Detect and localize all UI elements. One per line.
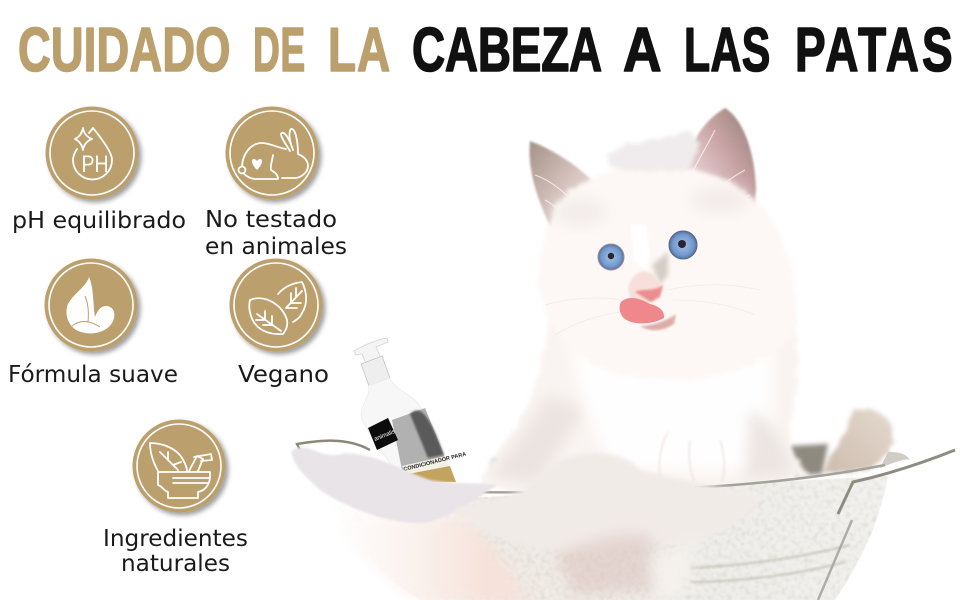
title: LA [328, 15, 390, 85]
tub rim [465, 465, 885, 492]
foam on head [608, 130, 700, 171]
bottle: animalis [374, 429, 396, 443]
tail [822, 409, 893, 474]
kitten body [478, 310, 812, 495]
bottle [354, 338, 467, 482]
icon: leaves [230, 258, 322, 352]
title [18, 15, 953, 85]
nose and tongue [620, 285, 676, 330]
tub body [330, 476, 888, 600]
title: LAS [684, 16, 770, 85]
eyes [598, 231, 697, 270]
label: Fórmula suave [8, 362, 178, 388]
badge: fórmula suave [8, 258, 178, 388]
icon: rabbit [226, 106, 318, 200]
label: Vegano [238, 362, 329, 388]
tub back rim [492, 444, 828, 482]
icon: pH drop: PH [82, 151, 108, 178]
icon: feather [44, 258, 138, 352]
icon: pH drop [46, 106, 138, 200]
kitten head [540, 165, 795, 380]
label: pH equilibrado [12, 208, 186, 234]
badge: ingredientes naturales [103, 420, 248, 577]
title: DE [253, 15, 305, 84]
kitten ears [529, 141, 606, 250]
badge: pH equilibrado [12, 106, 186, 234]
title: A [623, 16, 662, 85]
left handle [297, 441, 370, 463]
foam centre [453, 453, 760, 552]
face blaze [631, 225, 650, 272]
badge: no testado en animales: en animales [205, 234, 347, 260]
label: Ingredientes [103, 526, 248, 552]
title: PATAS [795, 15, 953, 85]
foam left [291, 448, 497, 523]
title: CUIDADO [18, 15, 230, 85]
badge: ingredientes naturales: naturales [121, 551, 230, 577]
icon: mortar and herbs [132, 420, 226, 512]
bottle: CONDICIONADOR PARA [403, 452, 467, 473]
title: CABEZA [412, 15, 602, 85]
label: No testado [205, 207, 337, 233]
badge: no testado en animales [205, 106, 347, 260]
photo: kitten in a metal tub with foam and bottle [291, 108, 955, 600]
right handle [838, 450, 955, 514]
whiskers [545, 285, 760, 335]
badge: vegano [230, 258, 329, 388]
